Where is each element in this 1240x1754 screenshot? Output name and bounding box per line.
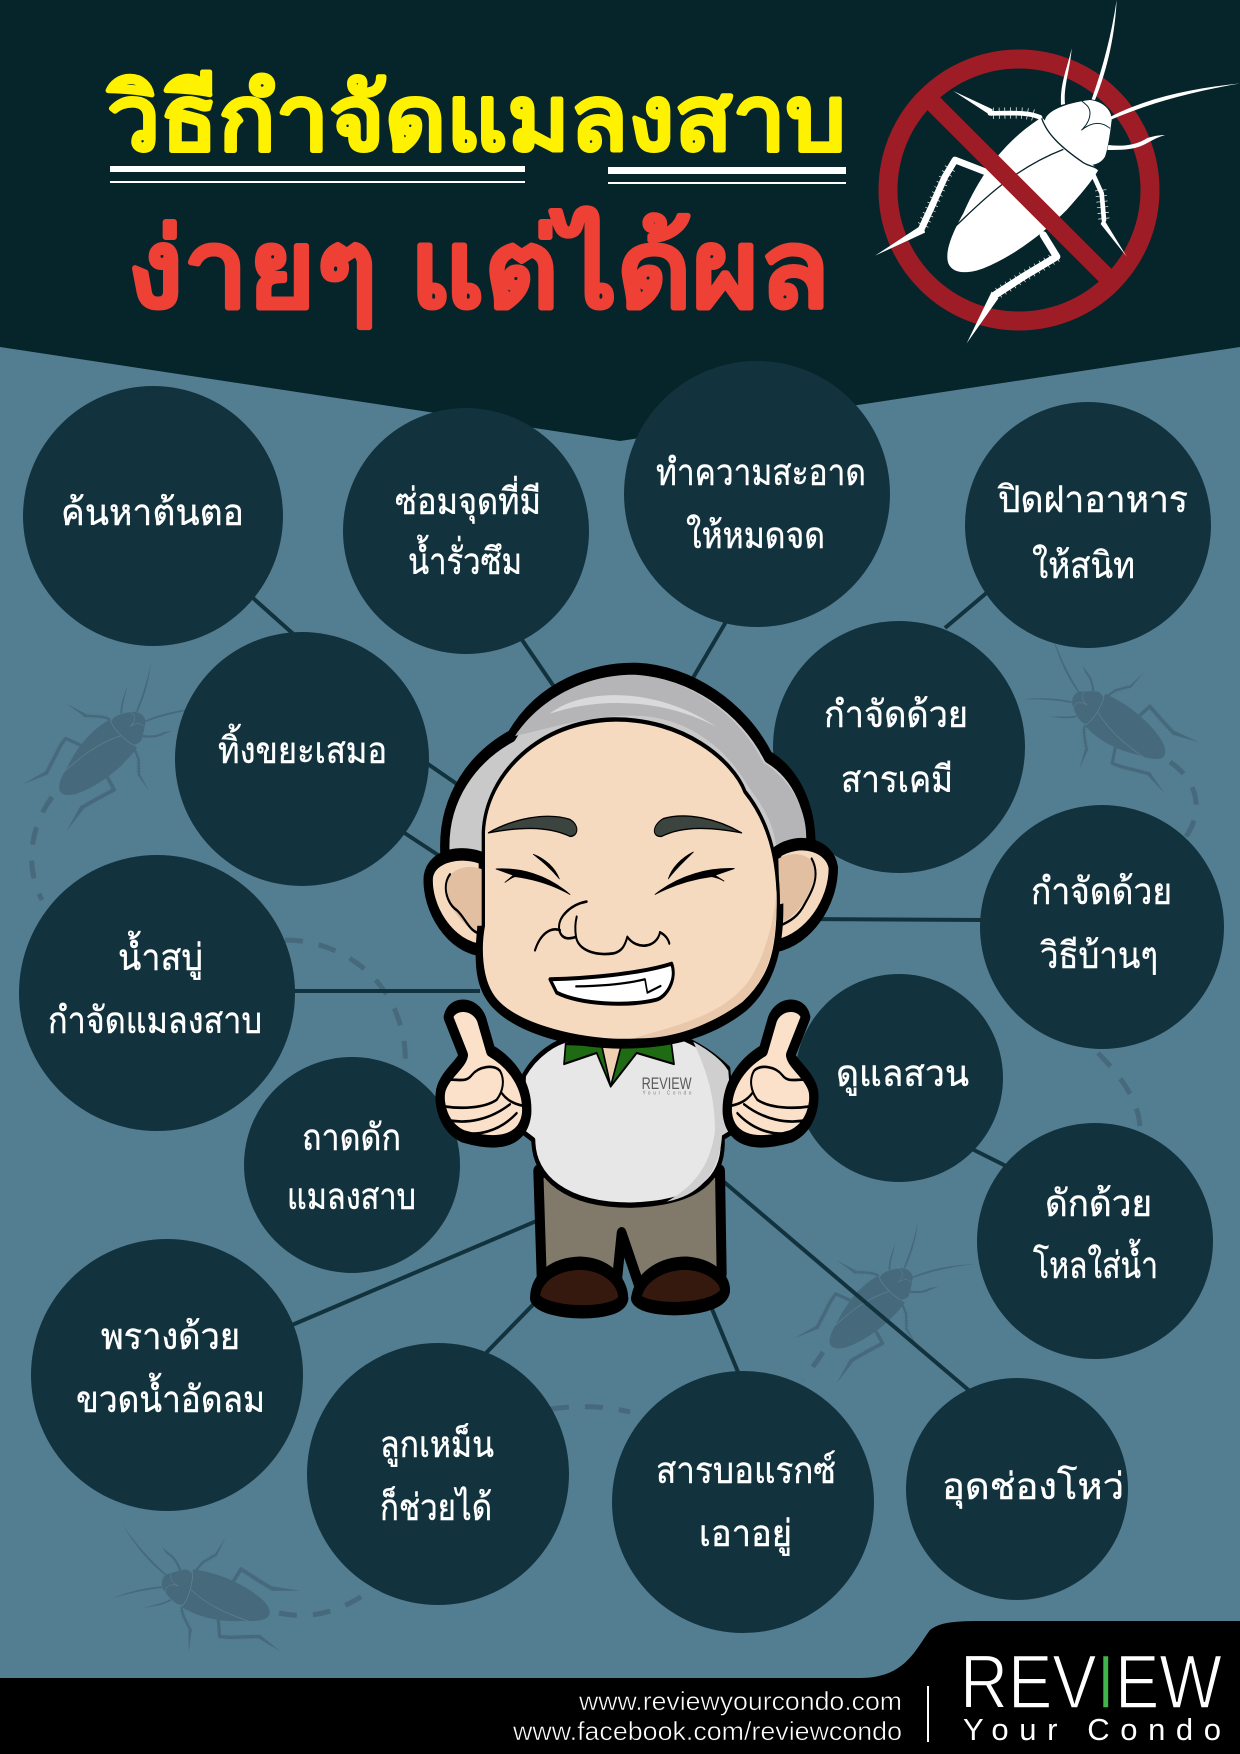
mascot: shirt logo: REVIEW <box>642 1074 692 1094</box>
circle: water jar trap <box>977 1123 1213 1359</box>
mascot: shirt logo: Your Condo <box>643 1090 691 1097</box>
circle: clean thoroughly <box>624 361 890 627</box>
circle: mothballs <box>307 1343 569 1605</box>
circle: trap tray <box>244 1057 460 1273</box>
circle: find the source: ค้นหาต้นตอ <box>61 492 244 533</box>
mascot: ears <box>428 844 833 950</box>
circle: soda bottle trap: ขวดน้ำอัดลม <box>76 1372 265 1420</box>
footer logo: Your Condo <box>963 1712 1221 1747</box>
mascot: left hand <box>440 1006 527 1141</box>
cockroach silhouette: top right <box>1012 611 1207 815</box>
circle: soap water: น้ำสบู่ <box>118 930 203 980</box>
circle: trap tray: ถาดดัก <box>302 1117 401 1158</box>
footer divider <box>927 1686 929 1742</box>
circle: take out trash <box>175 632 429 886</box>
circle: borax: สารบอแรกซ์ <box>656 1450 836 1491</box>
circle: fix leaks: น้ำรั่วซึม <box>408 534 522 582</box>
circle: clean thoroughly: ให้หมดจด <box>686 514 825 556</box>
cockroach silhouette: bottom left <box>84 1467 320 1708</box>
circle: soap water: กำจัดแมลงสาบ <box>48 1000 262 1041</box>
circle: soda bottle trap: พรางด้วย <box>101 1316 240 1357</box>
footer website links: www.facebook.com/reviewcondo <box>512 1716 902 1746</box>
footer website links: www.reviewyourcondo.com <box>578 1686 902 1716</box>
cockroach silhouette: left <box>20 656 213 838</box>
circles with labels <box>19 361 1224 1633</box>
circle: chemicals: กำจัดด้วย <box>824 694 968 735</box>
mascot: nose <box>535 902 669 954</box>
cockroach silhouette: centre bottom <box>792 1214 978 1390</box>
footer logo: REVIEW <box>960 1640 1222 1725</box>
circle: seal gaps: อุดช่องโหว่ <box>942 1465 1124 1509</box>
circle: find the source <box>23 386 283 646</box>
circle: soap water <box>19 855 295 1131</box>
circle: seal gaps <box>906 1378 1128 1600</box>
dashed trails <box>32 762 1196 1615</box>
title line 2: ง่ายๆ แต่ได้ผล <box>127 208 830 331</box>
mascot: smile <box>550 964 673 1004</box>
circle: fix leaks: ซ่อมจุดที่มี <box>395 475 541 524</box>
mascot: shirt <box>522 1033 733 1205</box>
circle: home remedies: วิธีบ้านๆ <box>1040 935 1158 976</box>
circle: mothballs: ลูกเหม็น <box>380 1421 494 1467</box>
title line 1: วิธีกำจัดแมลงสาบ <box>107 68 846 170</box>
mascot: closed eyes <box>496 852 734 894</box>
mascot: hair <box>445 669 811 935</box>
circle: home remedies <box>980 805 1224 1049</box>
circle: garden care: ดูแลสวน <box>836 1053 969 1096</box>
circle: soda bottle trap <box>31 1239 303 1511</box>
title double rule <box>110 166 846 184</box>
circle: trap tray: แมลงสาบ <box>287 1176 416 1217</box>
mascot: eyebrows <box>488 816 577 836</box>
circle: fix leaks <box>343 408 589 654</box>
mascot: shoes <box>535 1263 725 1312</box>
circle: water jar trap: ดักด้วย <box>1045 1183 1152 1224</box>
circle: borax <box>612 1371 874 1633</box>
circle: clean thoroughly: ทำความสะอาด <box>656 452 866 493</box>
circle: home remedies: กำจัดด้วย <box>1031 871 1172 912</box>
circle: take out trash: ทิ้งขยะเสมอ <box>218 723 387 771</box>
icon: no cockroach <box>875 0 1240 343</box>
mascot: right hand <box>727 1006 814 1141</box>
mascot <box>428 669 833 1312</box>
circle: garden care <box>795 974 1003 1182</box>
circle: water jar trap: โหลใส่น้ำ <box>1033 1238 1158 1286</box>
circle: chemicals: สารเคมี <box>841 759 953 800</box>
circle: chemicals <box>773 621 1025 873</box>
mascot: face <box>476 719 783 1049</box>
circle: cover food <box>965 402 1211 648</box>
mascot: trousers <box>538 1171 722 1283</box>
circle: cover food: ให้สนิท <box>1032 544 1135 586</box>
circle: cover food: ปิดฝาอาหาร <box>997 479 1188 520</box>
connector lines <box>253 590 1010 1393</box>
circle: mothballs: ก็ช่วยได้ <box>380 1484 492 1528</box>
footer band <box>0 1621 1240 1754</box>
header band <box>0 0 1240 441</box>
circle: borax: เอาอยู่ <box>699 1513 792 1556</box>
footer website links <box>512 1686 902 1746</box>
